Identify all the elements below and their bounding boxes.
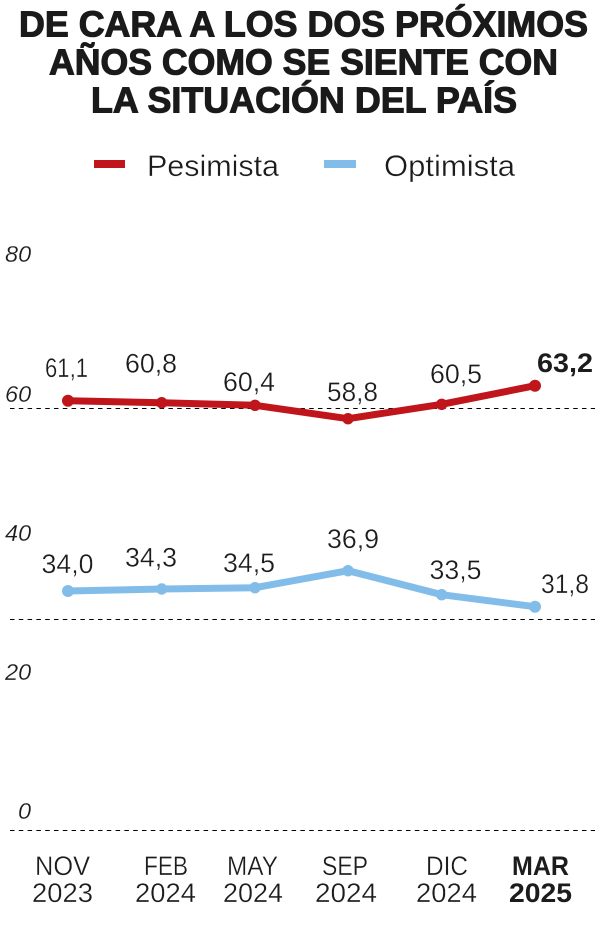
y axis labels: 0	[18, 798, 31, 824]
values: optimista: 34,3	[125, 542, 177, 572]
x axis labels: 2024	[223, 878, 283, 908]
values: pesimista: 61,1	[45, 353, 88, 383]
values: optimista	[42, 524, 589, 599]
grid lines	[10, 408, 595, 830]
title: LA SITUACIÓN DEL PAÍS	[91, 78, 517, 120]
x axis labels: 2024	[416, 878, 477, 908]
x axis labels: MAY	[227, 851, 278, 881]
values: pesimista: 58,8	[327, 377, 378, 407]
x axis labels: SEP	[322, 851, 368, 881]
x axis labels: MAR	[512, 851, 569, 881]
x axis labels: 2023	[32, 878, 93, 908]
x axis labels: 2024	[315, 878, 377, 908]
line: pesimista	[62, 380, 541, 424]
values: pesimista	[45, 348, 593, 407]
values: optimista: 34,0	[42, 549, 94, 579]
line: optimista	[62, 565, 541, 613]
x axis labels	[32, 851, 572, 908]
x axis labels: NOV	[35, 851, 90, 881]
x axis labels: 2024	[135, 878, 196, 908]
legend	[94, 150, 515, 183]
values: pesimista: 60,8	[125, 348, 177, 378]
y axis labels: 60	[5, 381, 31, 407]
values: optimista: 36,9	[327, 524, 379, 554]
x axis labels: FEB	[144, 851, 188, 881]
values: optimista: 31,8	[541, 569, 589, 599]
x axis labels: 2025	[509, 878, 572, 908]
y axis labels: 80	[5, 241, 31, 267]
values: pesimista: 60,5	[430, 359, 482, 389]
x axis labels: DIC	[426, 851, 468, 881]
legend: Pesimista	[147, 150, 279, 183]
y axis labels: 40	[5, 520, 31, 546]
legend: Optimista	[384, 150, 515, 183]
values: pesimista: 60,4	[223, 367, 275, 397]
title: DE CARA A LOS DOS PRÓXIMOS	[19, 2, 588, 44]
values: pesimista: 63,2	[537, 348, 593, 378]
y axis labels	[4, 241, 31, 824]
title: AÑOS COMO SE SIENTE CON	[49, 40, 558, 82]
values: optimista: 34,5	[223, 548, 275, 578]
y axis labels: 20	[4, 659, 31, 685]
values: optimista: 33,5	[430, 555, 482, 585]
title	[19, 2, 588, 120]
